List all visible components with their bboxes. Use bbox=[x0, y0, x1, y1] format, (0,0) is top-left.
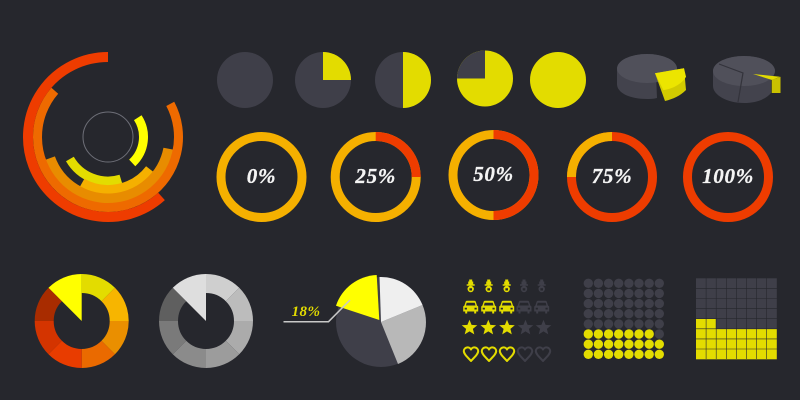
square waffle chart bbox=[696, 278, 777, 359]
light slice bbox=[380, 277, 422, 322]
dot matrix chart bbox=[584, 279, 664, 359]
pie half bbox=[375, 52, 431, 108]
arc: amber bbox=[82, 169, 150, 189]
yellow slice bbox=[336, 275, 379, 320]
ring 75% bbox=[572, 136, 652, 218]
3D pie with lifted wedge bbox=[617, 54, 686, 101]
dark dots bbox=[584, 279, 664, 339]
dark slice bbox=[336, 277, 426, 367]
yellow squares bbox=[696, 319, 777, 359]
ring 50%: 50% bbox=[473, 162, 514, 186]
callout line bbox=[284, 300, 350, 322]
center thin circle bbox=[83, 112, 133, 162]
arc: orange bbox=[38, 91, 179, 207]
row: stars bbox=[462, 320, 551, 334]
3D pie with split slices bbox=[713, 56, 780, 103]
icon rating rows bbox=[462, 280, 551, 361]
ring 25%: 25% bbox=[354, 164, 396, 188]
arc: lime bbox=[70, 159, 121, 181]
pie quarter bbox=[295, 52, 351, 108]
arc: yellow bbox=[132, 118, 143, 163]
pie chart with 18% callout bbox=[284, 275, 426, 367]
ring 50% bbox=[453, 134, 534, 216]
callout label: 18% bbox=[292, 304, 320, 320]
arc: dark amber bbox=[50, 149, 168, 198]
grey slice bbox=[381, 305, 426, 364]
pie full bbox=[530, 52, 586, 108]
row: cars bbox=[463, 301, 549, 314]
pie 0 bbox=[217, 52, 273, 108]
ring 25% bbox=[335, 136, 416, 218]
yellow dots bbox=[584, 329, 664, 359]
ring 0% bbox=[221, 136, 302, 218]
grid lines bbox=[696, 278, 777, 359]
row: babies bbox=[467, 280, 546, 292]
row: hearts bbox=[464, 347, 550, 361]
ring 100%: 100% bbox=[702, 164, 754, 188]
dark squares bbox=[696, 278, 777, 329]
pie row: fill progress bbox=[217, 50, 586, 108]
ring 100% bbox=[688, 136, 768, 218]
radial arc chart bbox=[28, 57, 179, 217]
segmented colour donut bbox=[44, 274, 119, 358]
ring 0%: 0% bbox=[247, 164, 276, 188]
segmented grey donut bbox=[168, 274, 244, 358]
ring 75%: 75% bbox=[592, 164, 632, 188]
pie three quarters bbox=[457, 50, 513, 106]
arc: red bbox=[28, 57, 162, 217]
ring gauges bbox=[221, 134, 768, 218]
